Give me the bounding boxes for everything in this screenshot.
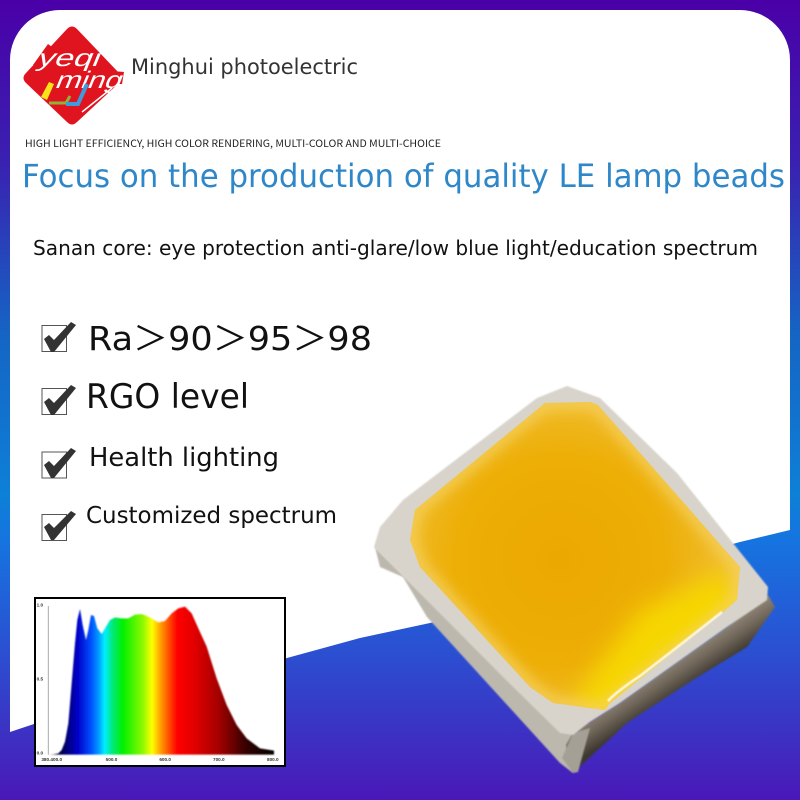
chip corner edge <box>562 728 590 773</box>
axis labels: 0.5 <box>37 677 44 682</box>
tagline: HIGH LIGHT EFFICIENCY, HIGH COLOR RENDERING, MULTI-COLOR AND MULTI-CHOICE <box>25 135 441 150</box>
chart frame <box>35 598 285 766</box>
LED lamp bead chip <box>374 386 775 773</box>
axis labels: 500.0 <box>106 757 118 762</box>
logo: red diamond brand mark: ming <box>52 67 129 94</box>
icon: checkbox 3 <box>42 448 76 478</box>
feature: RGO level <box>42 377 249 417</box>
main heading: Focus on the production of quality LE lamp beads <box>22 157 785 195</box>
axis labels: 700.0 <box>213 757 225 762</box>
axis labels: 800.0 <box>267 757 279 762</box>
feature: Customized spectrum <box>42 503 337 540</box>
axis labels: 380.400.0 <box>41 757 62 762</box>
axis labels: 1.0 <box>37 603 44 608</box>
logo: red diamond brand mark <box>24 26 129 124</box>
spectrum chart <box>35 598 285 766</box>
text: Customized spectrum: Customized spectrum <box>86 503 337 529</box>
feature: Ra values <box>42 319 372 358</box>
spectrum area <box>48 607 274 755</box>
text: Health lighting: Health lighting <box>89 443 279 473</box>
brand name: Minghui photoelectric <box>131 55 358 79</box>
chip right side face <box>566 595 775 773</box>
phosphor bright yellow glow <box>575 570 745 725</box>
chip top surface <box>374 386 768 735</box>
icon: checkbox 4 <box>42 511 76 540</box>
phosphor light rim <box>410 402 740 710</box>
icon: checkbox 2 <box>42 385 76 415</box>
yellow phosphor window <box>410 402 740 710</box>
specular highlight <box>608 612 722 701</box>
text: Ra values: Ra＞90＞95＞98 <box>88 319 372 358</box>
feature: Health lighting <box>42 443 279 478</box>
text: RGO level: RGO level <box>86 377 249 417</box>
subheading: Sanan core: eye protection anti-glare/low blue light/education spectrum <box>33 236 758 260</box>
icon: checkbox 1 <box>42 322 76 352</box>
axis labels <box>37 603 279 762</box>
logo: red diamond brand mark: yeqi <box>34 45 107 72</box>
axis labels: 600.0 <box>159 757 171 762</box>
axis labels: 0.0 <box>37 750 44 755</box>
y axis <box>47 606 50 755</box>
chip left side face <box>375 547 585 773</box>
